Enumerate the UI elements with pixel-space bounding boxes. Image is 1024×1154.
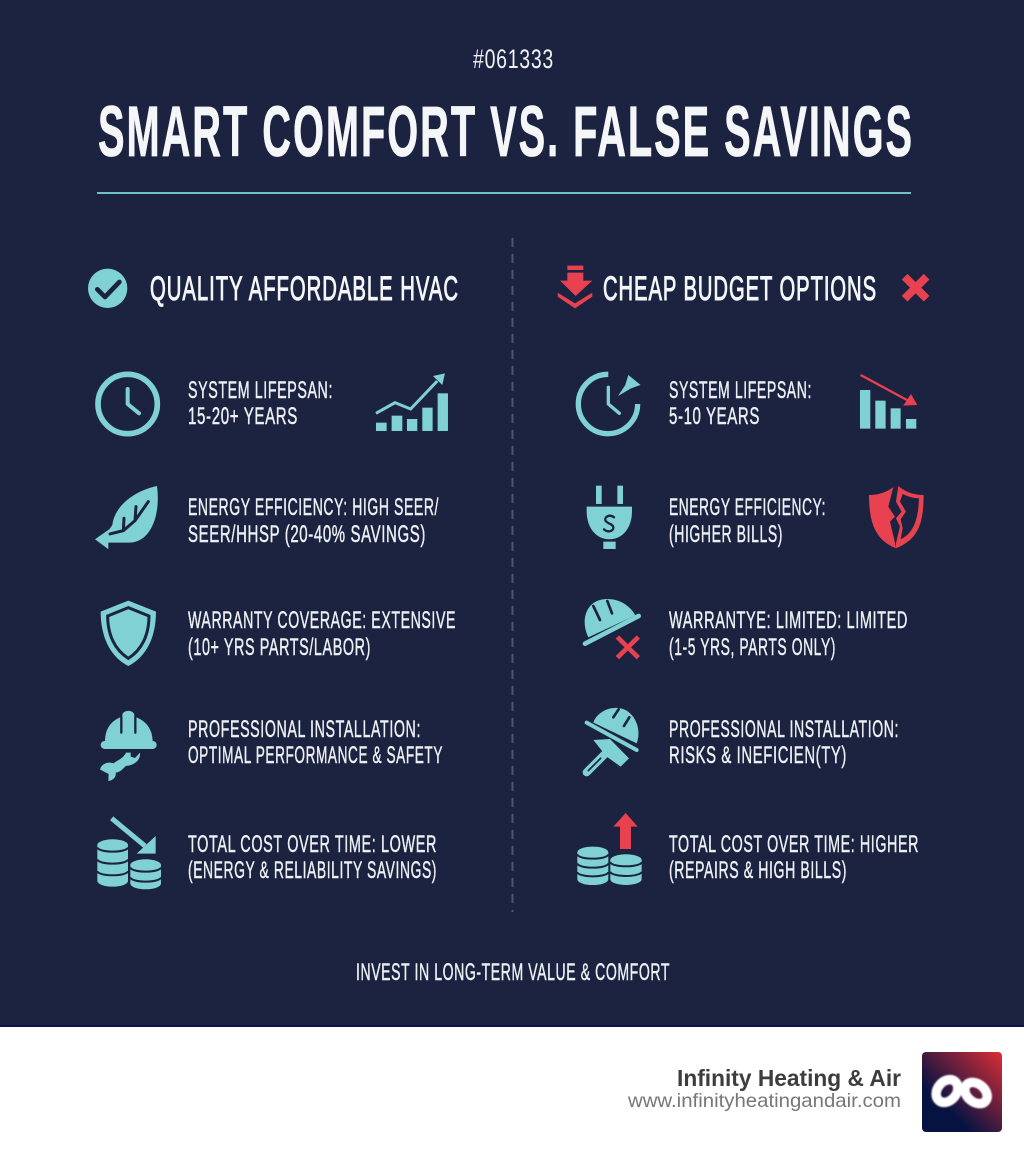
icon: rising bar chart	[376, 373, 448, 431]
text: total cost: (ENERGY & RELIABILITY SAVINGS)	[188, 857, 437, 884]
text: professional installation: OPTIMAL PERFORMANCE & SAFETY	[188, 742, 443, 769]
text: energy efficiency	[188, 494, 439, 548]
text: total cost	[669, 831, 919, 884]
text: professional installation: RISKS & INEFICIEN(TY)	[669, 742, 847, 769]
text: system lifespan	[188, 377, 333, 430]
text: energy efficiency: SEER/HHSP (20-40% SAVINGS)	[188, 521, 426, 548]
text: warranty: (1-5 YRS, PARTS ONLY)	[669, 634, 836, 661]
heading text left: QUALITY AFFORDABLE HVAC	[150, 270, 459, 308]
row: warranty coverage	[101, 601, 456, 666]
row: system lifespan	[578, 374, 917, 434]
text: professional installation	[188, 716, 443, 769]
text: system lifespan: 15-20+ YEARS	[188, 403, 298, 430]
panel: quality affordable HVAC	[88, 269, 459, 889]
website: www.infinityheatingandair.com	[627, 1090, 901, 1112]
icon: red cross	[905, 277, 927, 299]
icon: plug with dollar	[587, 486, 632, 549]
icon: check circle	[88, 269, 127, 308]
icon: broken clock	[578, 374, 641, 434]
icon: helmet and wrench	[100, 711, 157, 781]
company name: Infinity Heating & Air	[677, 1065, 901, 1091]
text: warranty coverage: (10+ YRS PARTS/LABOR)	[188, 634, 371, 661]
hex code label: #061333	[473, 44, 554, 74]
panel: white footer	[0, 1027, 1024, 1154]
text: system lifespan: 5-10 YEARS	[669, 403, 760, 430]
row: system lifespan	[98, 373, 448, 434]
text: warranty	[669, 607, 908, 661]
heading: quality affordable HVAC	[88, 269, 459, 308]
footer brand	[627, 1052, 1002, 1132]
row: total cost	[97, 818, 437, 889]
icon: coins with up arrow	[577, 813, 642, 885]
text: warranty coverage	[188, 607, 456, 661]
heading: cheap budget options	[558, 266, 927, 308]
text: energy efficiency: ENERGY EFFICIENCY: HIGH SEER/	[188, 494, 439, 521]
icon: cracked red shield	[869, 486, 924, 548]
text: system lifespan: SYSTEM LIFEPSAN:	[188, 377, 333, 404]
icon: shield	[101, 601, 156, 666]
text: professional installation: PROFESSIONAL INSTALLATION:	[188, 716, 421, 743]
text: total cost: TOTAL COST OVER TIME: LOWER	[188, 831, 437, 858]
icon: leaf with arrow	[95, 486, 158, 549]
text: system lifespan	[669, 377, 812, 430]
icon: falling bar chart	[860, 375, 917, 429]
icon: broken helmet and tool	[587, 708, 638, 772]
text: professional installation	[669, 716, 899, 769]
text: warranty coverage: WARRANTY COVERAGE: EXTENSIVE	[188, 607, 456, 634]
tagline: INVEST IN LONG-TERM VALUE & COMFORT	[356, 959, 670, 986]
text: energy efficiency: ENERGY EFFICIENCY:	[669, 494, 826, 521]
row: energy efficiency	[95, 486, 439, 549]
icon: coins with down arrow	[97, 818, 161, 889]
row: energy efficiency	[587, 486, 924, 549]
row: professional installation	[100, 711, 443, 781]
row: total cost	[577, 813, 919, 885]
text: system lifespan: SYSTEM LIFEPSAN:	[669, 377, 812, 404]
text: energy efficiency	[669, 494, 826, 548]
text: energy efficiency: (HIGHER BILLS)	[669, 521, 783, 548]
icon: clock	[98, 374, 157, 434]
text: total cost: (REPAIRS & HIGH BILLS)	[669, 857, 847, 884]
panel: cheap budget options	[558, 266, 927, 885]
logo: infinity mark	[922, 1052, 1002, 1132]
row: warranty	[585, 599, 908, 661]
icon: helmet with cross	[585, 599, 639, 658]
text: total cost	[188, 831, 437, 884]
icon: red down arrow	[558, 266, 592, 308]
row: professional installation	[587, 708, 899, 772]
